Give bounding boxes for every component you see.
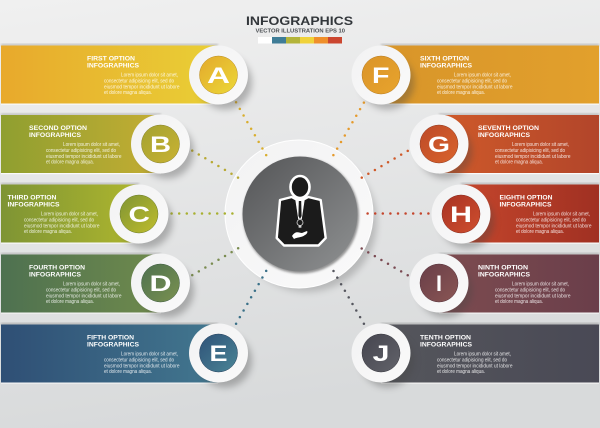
panel: ninth option: INFOGRAPHICS bbox=[478, 272, 530, 278]
panel: fifth option: eiusmod tempor incididunt ut labore bbox=[104, 363, 180, 369]
panel: seventh option bbox=[439, 114, 599, 174]
panel: fifth option: Lorem ipsum dolor sit amet, bbox=[121, 352, 178, 358]
panel: eighth option: et dolore magna aliqua. bbox=[516, 229, 564, 235]
panel: sixth option bbox=[381, 44, 599, 105]
dotted connectors bbox=[164, 96, 436, 330]
panel: first option: INFOGRAPHICS bbox=[87, 64, 139, 70]
badge H: H bbox=[450, 202, 472, 227]
panel: first option: et dolore magna aliqua. bbox=[104, 90, 152, 96]
panel: second option: INFOGRAPHICS bbox=[29, 133, 81, 139]
badge J: J bbox=[372, 341, 390, 366]
badge D bbox=[131, 254, 194, 318]
panel: fourth option: eiusmod tempor incididunt ut labore bbox=[46, 293, 122, 299]
badge H bbox=[432, 184, 494, 248]
panel: third option: eiusmod tempor incididunt ut labore bbox=[24, 223, 100, 229]
badge A bbox=[189, 46, 252, 110]
colour strip bbox=[258, 37, 342, 44]
badge C: C bbox=[128, 202, 150, 227]
panel: tenth option: eiusmod tempor incididunt ut labore bbox=[437, 363, 513, 369]
badge B: B bbox=[150, 132, 171, 157]
panel: ninth option: consectetur adipisicing elit, sed do bbox=[495, 288, 565, 294]
panel: fifth option: FIFTH OPTION bbox=[87, 336, 134, 342]
subtitle: VECTOR ILLUSTRATION EPS 10 bbox=[256, 28, 345, 34]
panel: fifth option: consectetur adipisicing elit, sed do bbox=[104, 358, 174, 364]
panel: ninth option bbox=[439, 253, 599, 314]
badge I: I bbox=[436, 271, 442, 296]
panel: eighth option: Lorem ipsum dolor sit amet, bbox=[533, 212, 590, 218]
panel: third option: Lorem ipsum dolor sit amet, bbox=[41, 212, 98, 218]
panel: eighth option: eiusmod tempor incididunt ut labore bbox=[516, 223, 592, 229]
panel: first option bbox=[1, 44, 218, 105]
panel: third option: THIRD OPTION bbox=[8, 196, 56, 202]
panel: fifth option bbox=[1, 323, 218, 384]
panel: sixth option: eiusmod tempor incididunt ut labore bbox=[437, 84, 513, 90]
panel: fifth option: et dolore magna aliqua. bbox=[104, 369, 152, 375]
panel: tenth option: INFOGRAPHICS bbox=[420, 342, 472, 348]
central hub bbox=[225, 140, 377, 292]
badge E: E bbox=[210, 341, 228, 366]
badge F: F bbox=[372, 63, 390, 88]
panel: second option: consectetur adipisicing elit, sed do bbox=[46, 148, 116, 154]
badge E bbox=[189, 324, 252, 388]
badge A: A bbox=[207, 63, 230, 88]
panel: ninth option: Lorem ipsum dolor sit amet, bbox=[512, 282, 569, 288]
panel: third option bbox=[1, 183, 139, 244]
panel: seventh option: SEVENTH OPTION bbox=[478, 126, 539, 132]
panel: fourth option: Lorem ipsum dolor sit amet, bbox=[63, 282, 120, 288]
panel: seventh option: et dolore magna aliqua. bbox=[495, 160, 543, 166]
panel: third option: INFOGRAPHICS bbox=[8, 202, 60, 208]
panel: sixth option: SIXTH OPTION bbox=[420, 56, 469, 62]
panel: tenth option: consectetur adipisicing elit, sed do bbox=[437, 358, 507, 364]
badge B bbox=[131, 114, 194, 178]
panel: seventh option: consectetur adipisicing elit, sed do bbox=[495, 148, 565, 154]
panel: second option: SECOND OPTION bbox=[29, 126, 87, 132]
panel: fourth option bbox=[1, 253, 161, 314]
icon: businessman with light bulb bbox=[277, 176, 326, 246]
panel: ninth option: et dolore magna aliqua. bbox=[495, 299, 543, 305]
panel: eighth option: consectetur adipisicing elit, sed do bbox=[516, 218, 586, 224]
panel: eighth option: INFOGRAPHICS bbox=[500, 202, 552, 208]
panel: eighth option bbox=[461, 183, 599, 244]
badge C bbox=[110, 184, 172, 248]
panel: first option: eiusmod tempor incididunt ut labore bbox=[104, 84, 180, 90]
panel: second option: et dolore magna aliqua. bbox=[46, 160, 94, 166]
panel: second option: eiusmod tempor incididunt ut labore bbox=[46, 154, 122, 160]
badge J bbox=[352, 324, 414, 388]
panel: fourth option: FOURTH OPTION bbox=[29, 266, 85, 272]
panel: tenth option: et dolore magna aliqua. bbox=[437, 369, 485, 375]
badge F bbox=[352, 46, 414, 110]
badge G: G bbox=[428, 132, 450, 157]
panel: seventh option: Lorem ipsum dolor sit amet, bbox=[512, 142, 569, 148]
panel: eighth option: EIGHTH OPTION bbox=[500, 196, 552, 202]
panel: tenth option bbox=[381, 323, 599, 384]
panel: seventh option: eiusmod tempor incididunt ut labore bbox=[495, 154, 571, 160]
panel: sixth option: INFOGRAPHICS bbox=[420, 64, 472, 70]
panel: second option: Lorem ipsum dolor sit amet, bbox=[63, 142, 120, 148]
panel: fourth option: consectetur adipisicing elit, sed do bbox=[46, 288, 116, 294]
panel: fourth option: INFOGRAPHICS bbox=[29, 272, 81, 278]
title block bbox=[246, 16, 353, 44]
panel: second option bbox=[1, 114, 161, 174]
panel: third option: consectetur adipisicing elit, sed do bbox=[24, 218, 94, 224]
panel: first option: Lorem ipsum dolor sit amet, bbox=[121, 72, 178, 78]
panel: fifth option: INFOGRAPHICS bbox=[87, 342, 139, 348]
badge D: D bbox=[150, 271, 172, 296]
panel: fourth option: et dolore magna aliqua. bbox=[46, 299, 94, 305]
panel: first option: consectetur adipisicing elit, sed do bbox=[104, 78, 174, 84]
badge I bbox=[410, 254, 472, 318]
badge G bbox=[410, 114, 472, 178]
panel: sixth option: consectetur adipisicing elit, sed do bbox=[437, 78, 507, 84]
panel: tenth option: Lorem ipsum dolor sit amet, bbox=[454, 352, 511, 358]
panel: tenth option: TENTH OPTION bbox=[420, 336, 471, 342]
heading: infographics: INFOGRAPHICS bbox=[246, 16, 353, 28]
panel: seventh option: INFOGRAPHICS bbox=[478, 133, 530, 139]
panel: ninth option: NINTH OPTION bbox=[478, 266, 528, 272]
panel: sixth option: et dolore magna aliqua. bbox=[437, 90, 485, 96]
panel: sixth option: Lorem ipsum dolor sit amet, bbox=[454, 72, 511, 78]
panel: third option: et dolore magna aliqua. bbox=[24, 229, 72, 235]
panel: first option: FIRST OPTION bbox=[87, 56, 135, 62]
panel: ninth option: eiusmod tempor incididunt ut labore bbox=[495, 293, 571, 299]
